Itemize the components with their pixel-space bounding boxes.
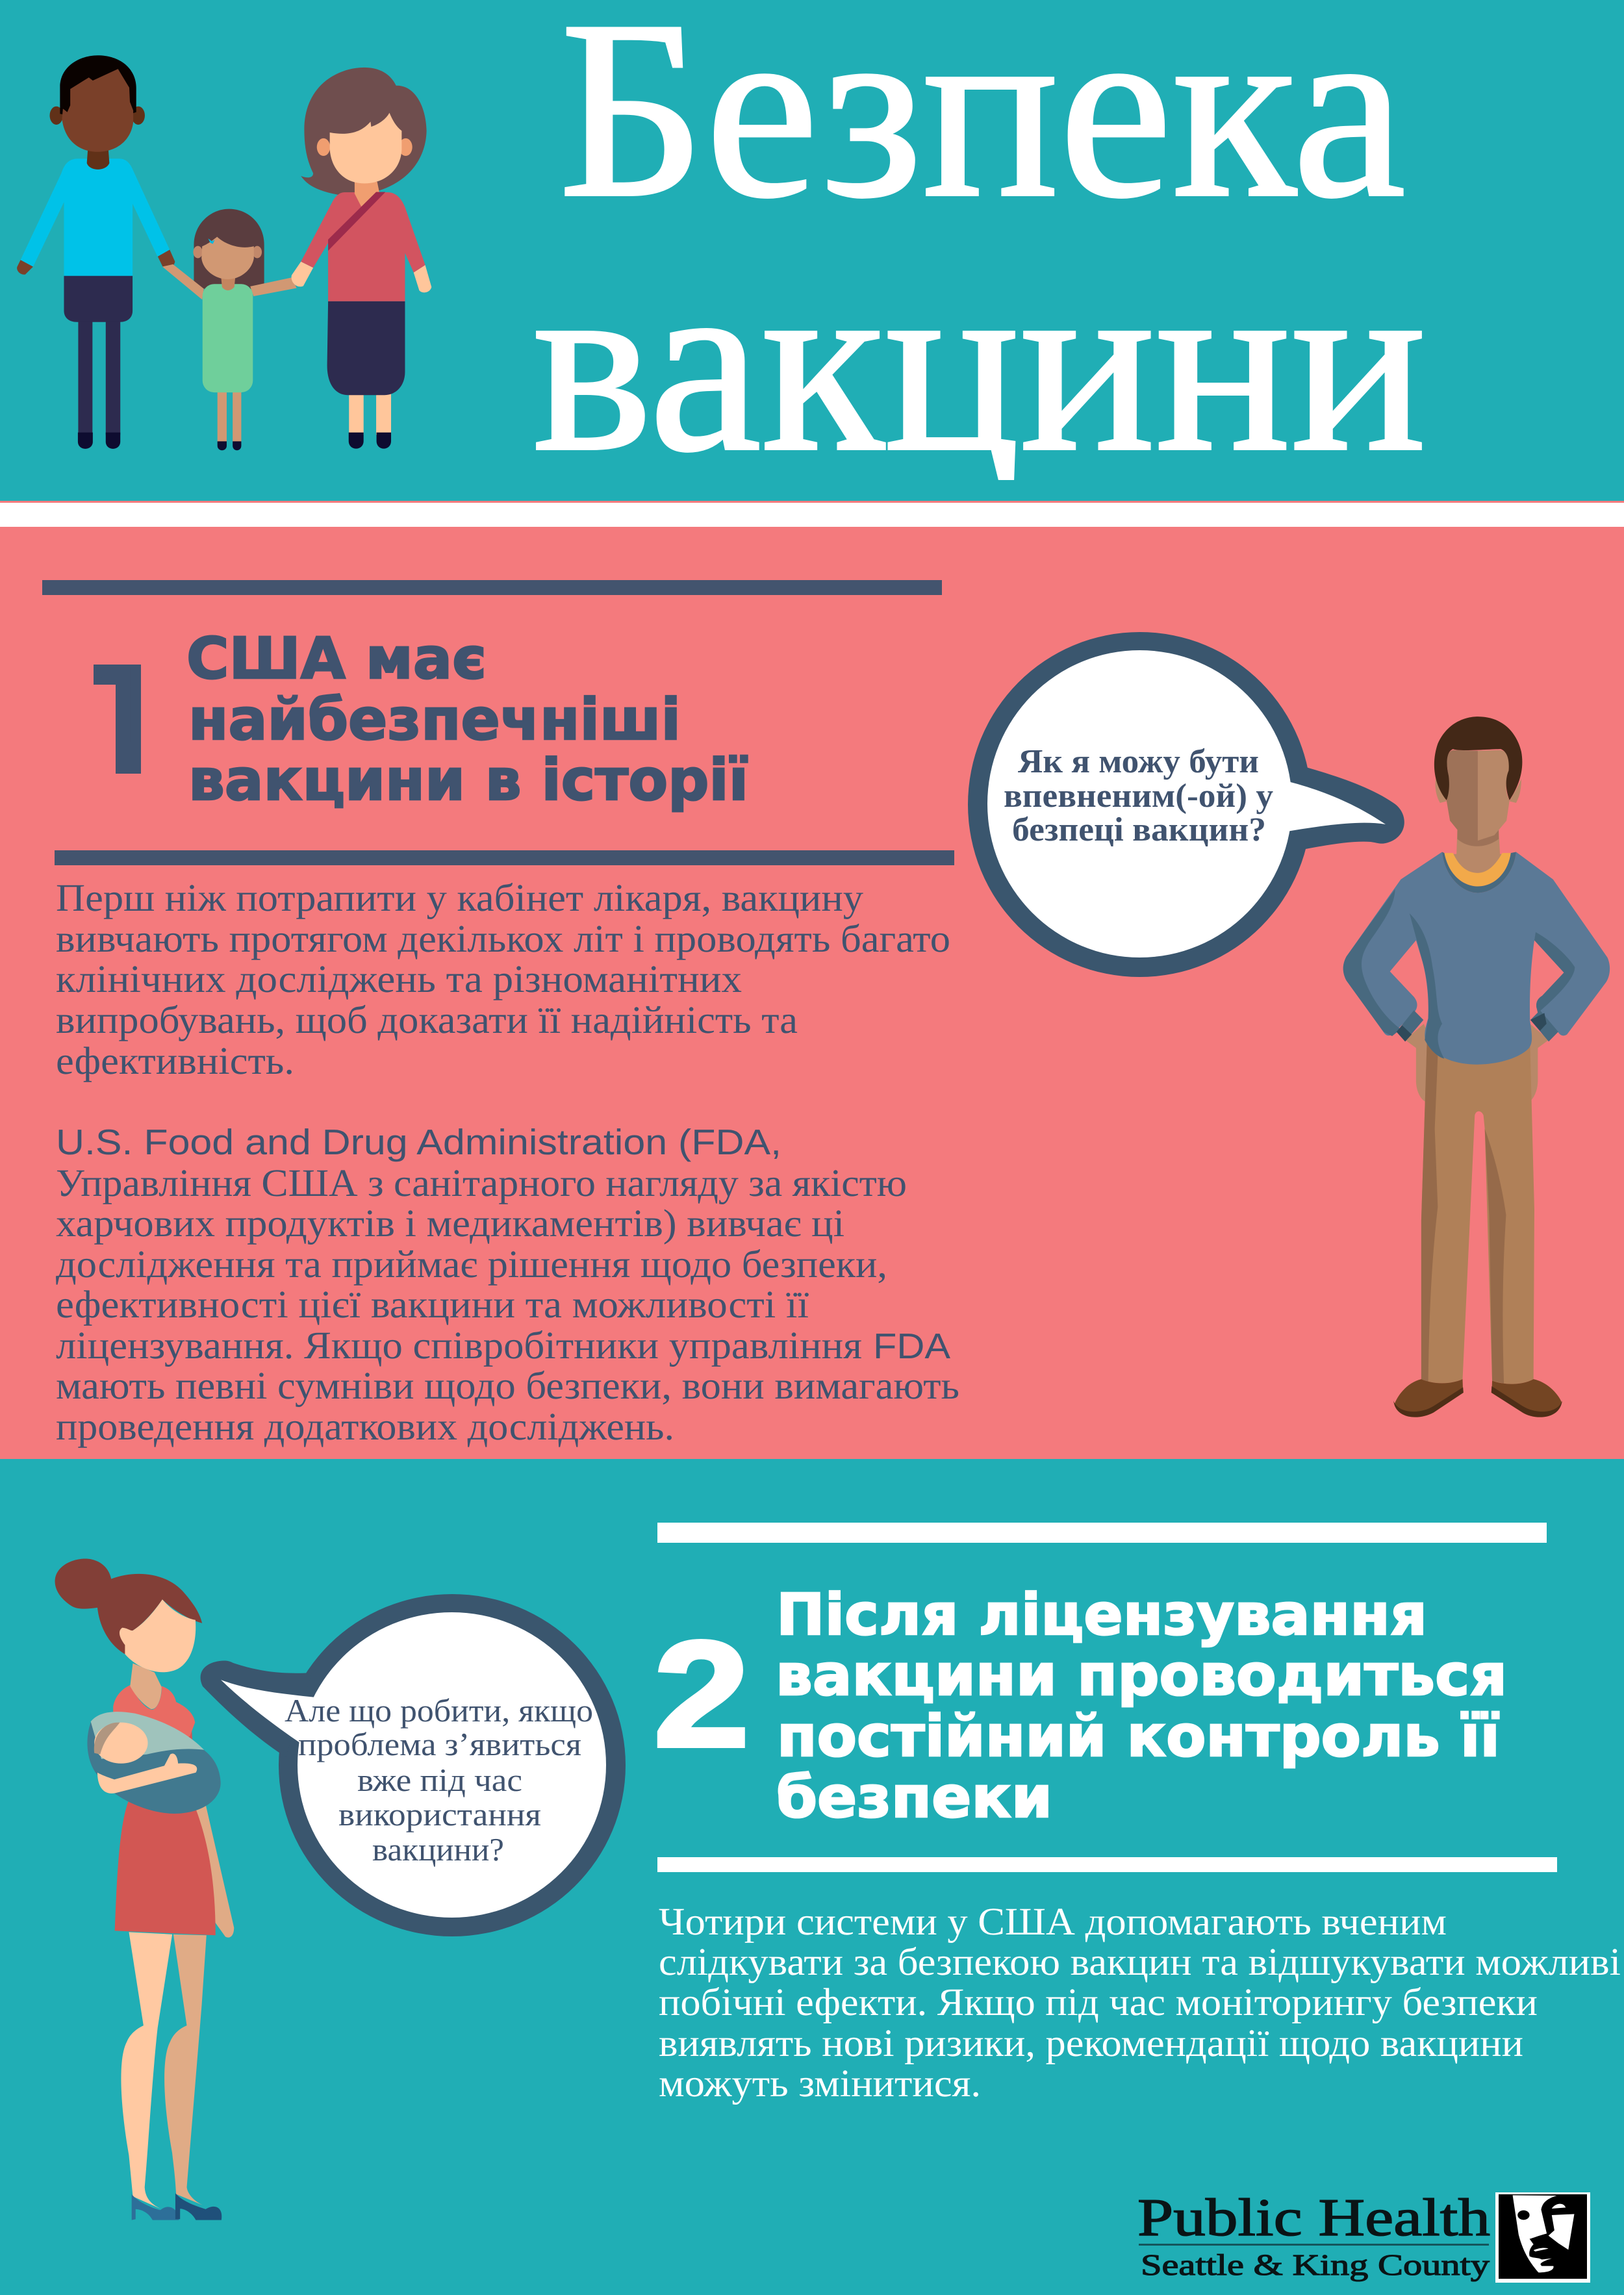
icon: family of three xyxy=(17,55,431,450)
icon: mother xyxy=(292,68,431,449)
speech bubble: how can I be sure xyxy=(968,632,1404,977)
title: вакцини xyxy=(533,222,1427,504)
text block: vaccine study before licensing: ефективність. xyxy=(56,1039,294,1082)
text block: vaccine study before licensing: Перш ніж потрапити у кабінет лікаря, вакцину xyxy=(56,876,863,919)
icon: man standing with hands on hips xyxy=(1343,716,1610,1417)
number 2: 2 xyxy=(653,1610,750,1779)
speech bubble: what if a problem appears xyxy=(201,1594,626,1936)
text block: FDA review: проведення додаткових досліджень. xyxy=(56,1405,674,1448)
logo: Public Health Seattle and King County: Public Health xyxy=(1137,2188,1490,2247)
text block: FDA review: FDA xyxy=(873,1326,950,1366)
text block: vaccine study before licensing: клінічних досліджень та різноманітних xyxy=(56,957,742,1000)
heading: section 2: безпеки xyxy=(776,1764,1052,1831)
speech bubble: what if a problem appears: Але що робити, якщо xyxy=(285,1692,593,1729)
text block: safety monitoring systems: побічні ефекти. Якщо під час моніторингу безпеки xyxy=(659,1981,1538,2023)
text block: FDA review: U.S. Food and Drug Administration (FDA, xyxy=(56,1122,781,1162)
text block: vaccine study before licensing xyxy=(56,876,950,1082)
speech bubble: what if a problem appears: вакцини? xyxy=(372,1831,504,1868)
speech bubble: how can I be sure: Як я можу бути xyxy=(1018,743,1259,780)
heading: section 2: Після ліцензування xyxy=(776,1581,1427,1648)
icon: father xyxy=(17,55,175,449)
speech bubble: how can I be sure: впевненим(-ой) у xyxy=(1004,778,1273,815)
logo: Public Health Seattle and King County: Seattle & King County xyxy=(1141,2248,1490,2281)
speech bubble: what if a problem appears: вже під час xyxy=(357,1762,522,1798)
heading: section 1: найбезпечніші xyxy=(188,686,681,753)
text block: FDA review: харчових продуктів і медикаментів) вивчає ці xyxy=(56,1202,844,1245)
speech bubble: what if a problem appears: використання xyxy=(338,1796,541,1832)
heading: section 1 xyxy=(186,625,748,813)
text block: safety monitoring systems: Чотири системи у США допомагають вченим xyxy=(659,1900,1447,1943)
text block: FDA review: мають певні сумніви щодо безпеки, вони вимагають xyxy=(56,1364,959,1407)
text block: FDA review: дослідження та приймає рішення щодо безпеки, xyxy=(56,1243,887,1286)
speech bubble: how can I be sure: безпеці вакцин? xyxy=(1012,811,1266,848)
heading: section 2: постійний контроль її xyxy=(777,1703,1500,1769)
icon: child xyxy=(162,209,297,450)
speech bubble: what if a problem appears: проблема з’явиться xyxy=(298,1726,581,1762)
number 1 xyxy=(94,665,141,774)
text block: safety monitoring systems xyxy=(659,1900,1621,2105)
text block: safety monitoring systems: виявлять нові ризики, рекомендації щодо вакцини xyxy=(659,2022,1523,2064)
text block: safety monitoring systems: слідкувати за безпекою вакцин та відшукувати можливі xyxy=(659,1940,1621,1983)
logo: Public Health Seattle and King County xyxy=(1137,2188,1590,2283)
text block: FDA review: ефективності цієї вакцини та можливості її xyxy=(56,1283,809,1326)
number 1: 1 xyxy=(82,635,155,807)
text block: safety monitoring systems: можуть змінитися. xyxy=(659,2062,981,2105)
text block: FDA review: Управління США з санітарного нагляду за якістю xyxy=(56,1161,907,1204)
panel: header xyxy=(0,0,1624,527)
text block: vaccine study before licensing: вивчають протягом декількох літ і проводять багато xyxy=(56,917,950,960)
title xyxy=(536,27,1422,480)
panel: section 2 xyxy=(0,1459,1624,2295)
icon: mother holding baby xyxy=(55,1559,234,2220)
text block: FDA review xyxy=(56,1122,959,1448)
panel: section 1 xyxy=(0,527,1624,1459)
text block: vaccine study before licensing: випробувань, щоб доказати її надійність та xyxy=(56,998,798,1041)
heading: section 2: вакцини проводиться xyxy=(776,1642,1507,1708)
heading: section 2 xyxy=(776,1581,1507,1831)
heading: section 1: США має xyxy=(186,625,487,692)
text block: FDA review: ліцензування. Якщо співробітники управління xyxy=(56,1324,862,1367)
heading: section 1: вакцини в історії xyxy=(188,746,748,813)
